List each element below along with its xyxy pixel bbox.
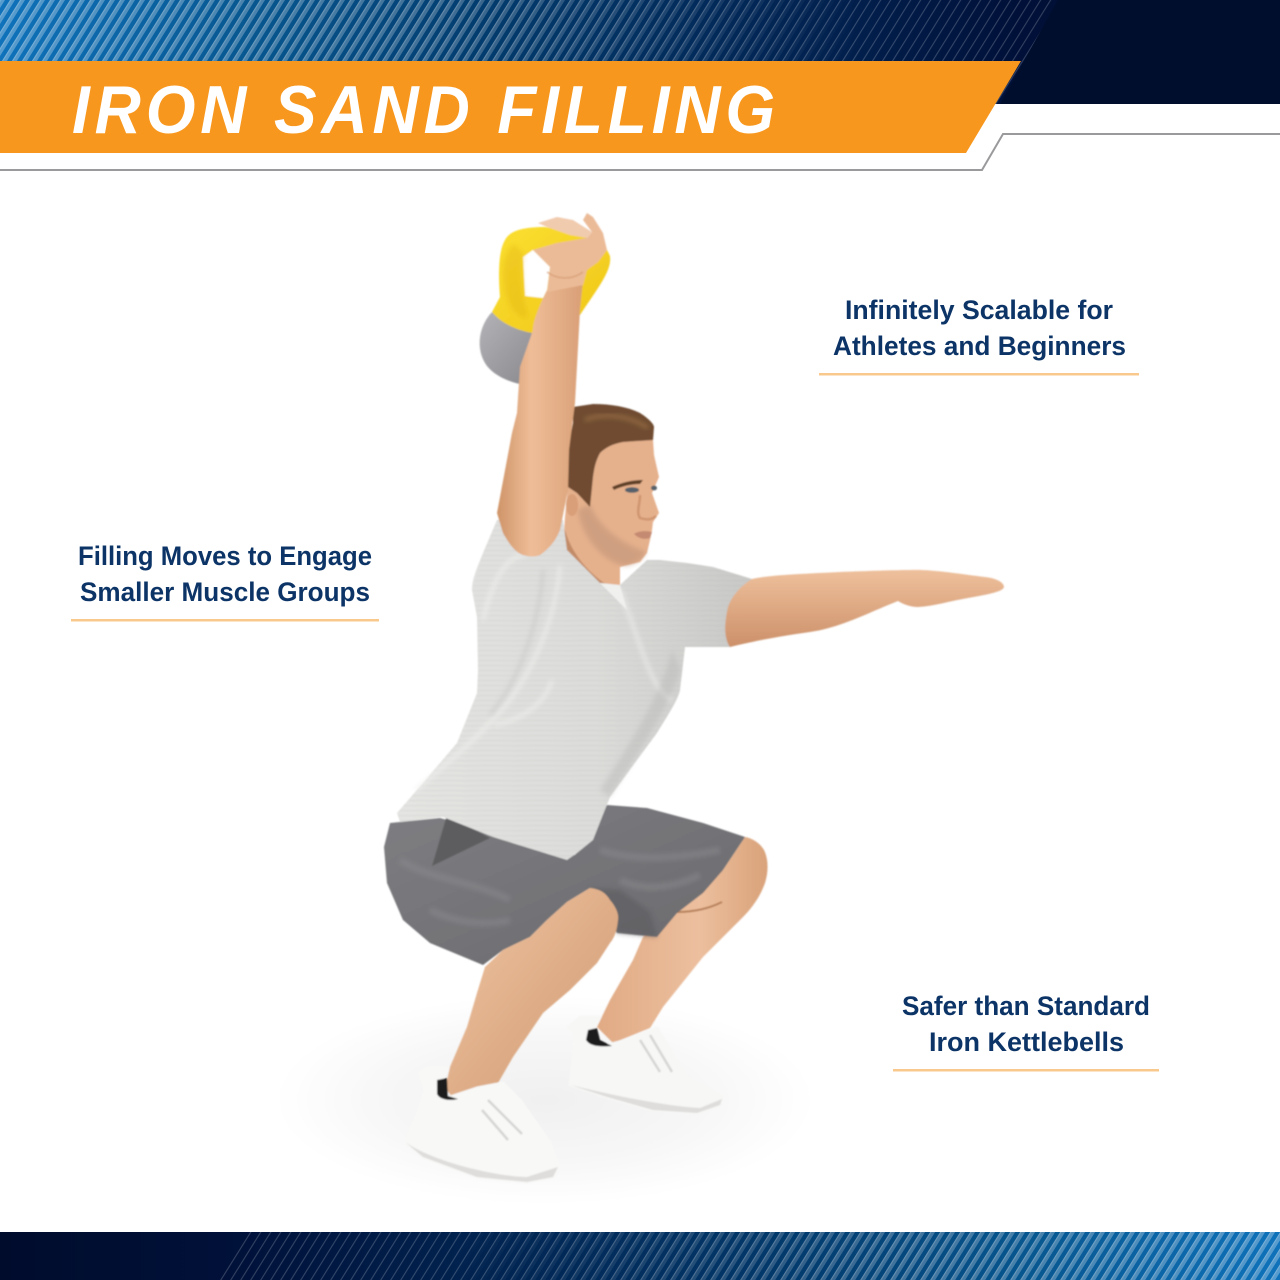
callout: muscle groups: Smaller Muscle Groups [80, 577, 370, 607]
hair [568, 404, 654, 507]
undershirt collar [600, 583, 627, 610]
athlete with kettlebell [384, 213, 1004, 1182]
far knee crease [677, 902, 722, 912]
floor shadow [275, 995, 815, 1205]
far shoe [568, 1017, 723, 1113]
ear [566, 494, 578, 516]
footer band [0, 1232, 1280, 1280]
neck shadow [563, 530, 612, 590]
stubble shading [578, 505, 646, 566]
far leg [597, 837, 768, 1043]
header outline [0, 134, 1280, 170]
raised arm and hand [497, 213, 607, 556]
callout: scalable: Athletes and Beginners [833, 331, 1126, 361]
callout: scalable [819, 295, 1139, 376]
header band [0, 0, 1280, 104]
callout: muscle groups [71, 541, 379, 622]
far eye [651, 486, 657, 490]
eyebrow [612, 480, 643, 490]
title: IRON SAND FILLING [72, 71, 775, 147]
eye [625, 487, 639, 493]
head [563, 404, 659, 590]
kettlebell [480, 227, 610, 385]
callout: safer [893, 991, 1159, 1072]
callout: safer: Iron Kettlebells [929, 1027, 1124, 1057]
near leg [445, 888, 618, 1097]
callout: scalable: Infinitely Scalable for [845, 295, 1113, 325]
shirt folds [415, 555, 672, 790]
t-shirt [397, 520, 752, 860]
callout: muscle groups: Filling Moves to Engage [78, 541, 372, 571]
callout: safer: Safer than Standard [902, 991, 1150, 1021]
near shoe [405, 1068, 559, 1182]
shorts [384, 805, 745, 965]
lips [634, 531, 652, 539]
outstretched arm [725, 570, 1004, 647]
nose shadow [638, 495, 656, 519]
title banner [0, 61, 1021, 153]
